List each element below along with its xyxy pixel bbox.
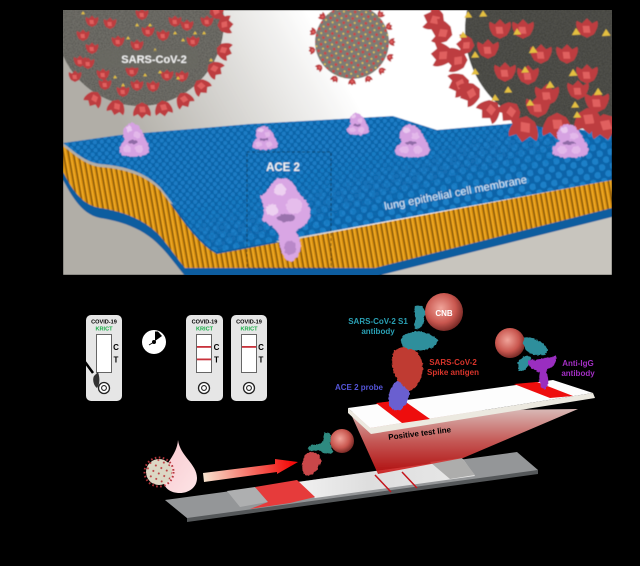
magnified test line band [376,400,430,423]
card: sample applied [85,315,122,401]
lipid tails [63,146,612,268]
floor shadow right [373,217,612,275]
card: positive result [186,315,223,401]
panel: membrane illustration [63,10,612,275]
strip: lower test strip [165,452,538,522]
card: negative result [231,315,267,401]
label: SARS-CoV-2 [121,50,187,68]
magnification beam [350,409,578,474]
label: spike antigen: SARS-CoV-2 [429,358,477,367]
complex: conjugate [302,429,354,476]
label: S1 antibody: antibody [361,327,395,336]
label: positive test line: Positive test line [388,425,452,442]
dashed zoom box [247,152,331,268]
card: sample applied: C [113,343,119,352]
ACE 2 receptors on membrane [119,113,588,158]
icon: CNB bead [425,293,463,331]
strip: test lines [375,472,417,492]
membrane front spheres [182,125,612,252]
icon: clock [142,330,166,354]
panel: lateral flow strip diagram [144,293,595,522]
card: sample applied: KRICT [95,326,113,332]
virus: right large [422,10,612,143]
card: negative result: C [258,343,264,352]
label: spike antigen: Spike antigen [427,368,479,377]
label: ACE 2: ACE 2 [266,162,300,174]
card: negative result: KRICT [240,326,258,332]
label: lung epithelial cell membrane: lung epithelial cell membrane [383,174,528,213]
label: S1 antibody: SARS-CoV-2 S1 [348,317,408,326]
lower lipid layer [63,165,612,277]
card: positive result: C [214,343,220,352]
label: SARS-CoV-2: SARS-CoV-2 [121,54,187,66]
strip: magnified strip [348,380,595,434]
label: anti-IgG antibody: Anti-IgG [562,359,594,368]
magnified control line band [514,382,573,398]
panel background [63,10,612,275]
strip: red conjugate pad [250,480,315,509]
card: sample applied: T [114,356,119,364]
icon: small virus [144,458,174,486]
label: ACE 2 probe: ACE 2 probe [335,383,384,392]
virus: SARS-CoV-2 left [63,10,234,119]
card: positive result: COVID-19 [192,320,217,326]
icon: CNB bead: CNB [435,309,453,318]
panel: test procedure cards [85,315,267,401]
arrow: flow direction [203,459,298,482]
complex: control line [495,328,556,389]
card: negative result: COVID-19 [236,320,262,326]
label: anti-IgG antibody: antibody [561,369,595,378]
icon: sample droplet [163,440,197,493]
strip: grey absorbent pad [430,458,475,479]
membrane surface [63,116,612,252]
card: negative result: T [259,356,264,364]
complex: test line sandwich [385,306,438,413]
card: positive result: T [214,356,219,364]
receptor: ACE 2 large [260,178,310,261]
card: positive result: KRICT [196,326,214,332]
card: sample applied: COVID-19 [91,320,117,326]
virus: centre small [308,5,396,86]
